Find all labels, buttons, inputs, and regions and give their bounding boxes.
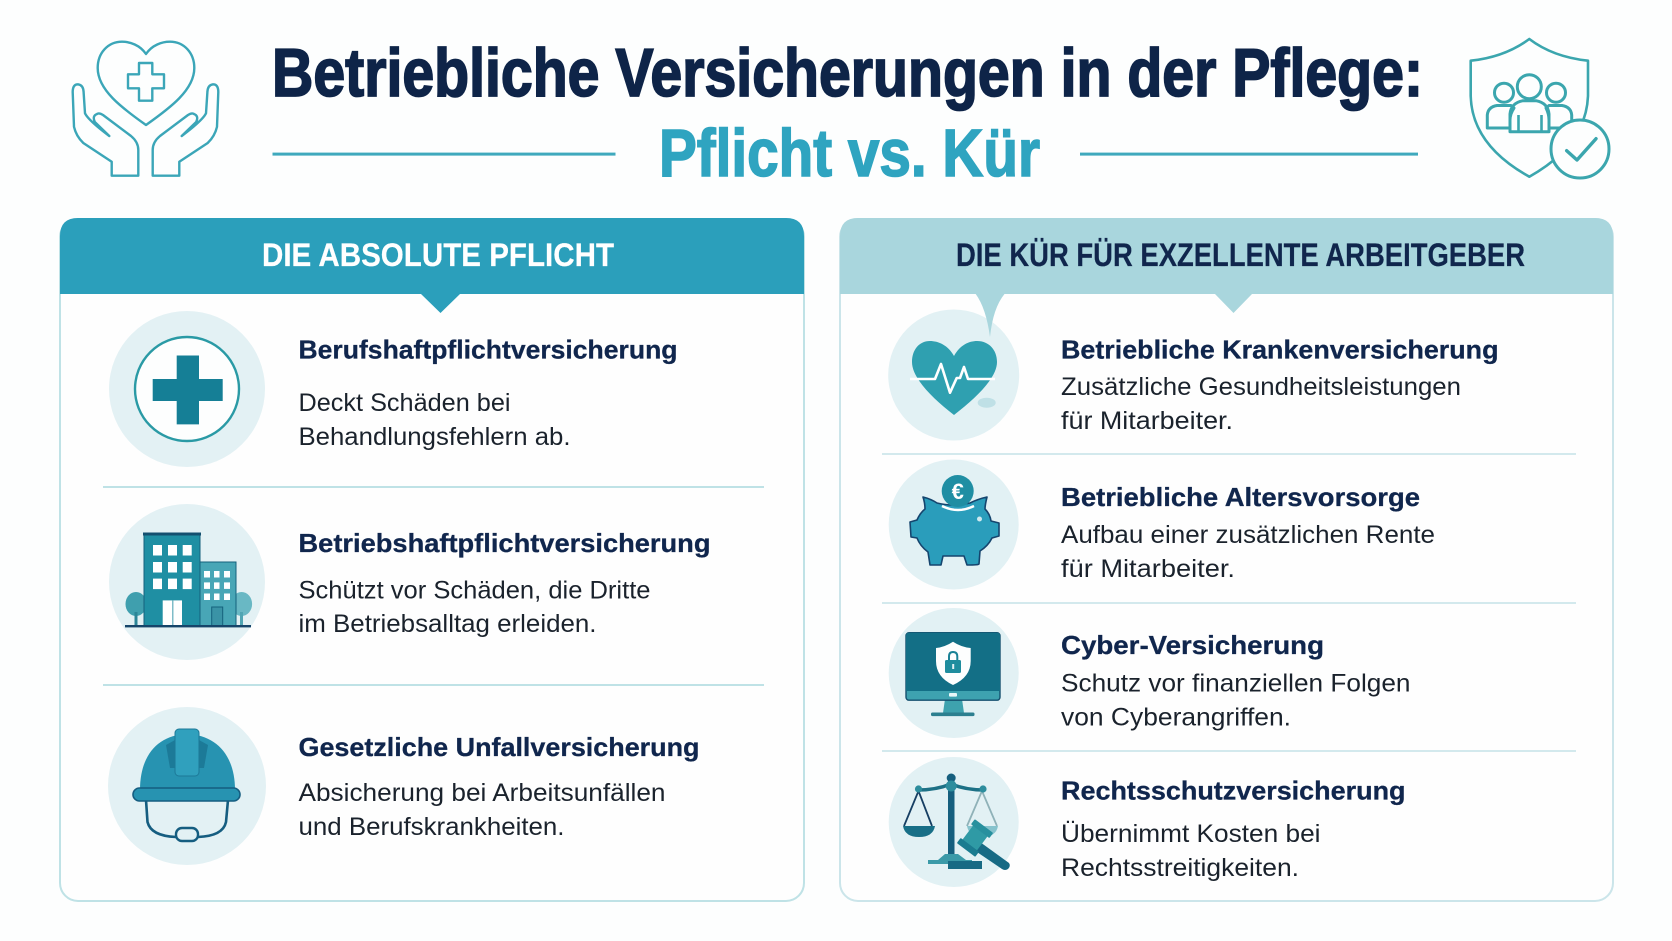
panel header: DIE KÜR FÜR EXZELLENTE ARBEITGEBER [956, 237, 1525, 273]
text: Rechtsschutzversicherung: Rechtsschutzversicherung [1061, 776, 1406, 806]
title: Betriebliche Versicherungen in der Pflege: [272, 35, 1423, 111]
text: Betriebliche Altersvorsorge: Betriebliche Altersvorsorge [1061, 482, 1420, 512]
text: Berufshaftpflichtversicherung [298, 334, 678, 451]
text: Betriebliche Altersvorsorge: für Mitarbeiter. [1061, 555, 1235, 583]
icon: building [109, 504, 265, 660]
text: Berufshaftpflichtversicherung: Berufshaftpflichtversicherung [298, 334, 678, 364]
text: Rechtsschutzversicherung: Übernimmt Kosten bei [1061, 820, 1320, 848]
text: Betriebshaftpflichtversicherung: Schützt vor Schäden, die Dritte [298, 576, 650, 604]
subtitle: Pflicht vs. Kür [659, 116, 1040, 191]
circle behind heart icon [888, 310, 1019, 440]
panel header: DIE ABSOLUTE PFLICHT [262, 237, 614, 273]
text: Cyber-Versicherung: von Cyberangriffen. [1061, 704, 1291, 732]
text: Cyber-Versicherung: Schutz vor finanziellen Folgen [1061, 670, 1410, 698]
icon: piggy bank: € [952, 479, 964, 504]
panel header [60, 218, 804, 313]
icon: heart with pulse [910, 341, 997, 415]
text: Berufshaftpflichtversicherung: Deckt Schäden bei [298, 389, 510, 417]
text: Betriebliche Krankenversicherung: Betriebliche Krankenversicherung [1061, 334, 1498, 364]
icon: hard hat [108, 707, 266, 865]
icon: medical cross [109, 311, 265, 467]
icon: shield with people and check [1471, 39, 1609, 178]
panel: die Kür [840, 218, 1613, 901]
text: Cyber-Versicherung: Cyber-Versicherung [1061, 630, 1324, 660]
text: Betriebliche Krankenversicherung: Zusätzliche Gesundheitsleistungen [1061, 373, 1461, 401]
panel: die absolute Pflicht [60, 218, 804, 901]
text: Berufshaftpflichtversicherung: Behandlungsfehlern ab. [298, 423, 570, 451]
text: Betriebshaftpflichtversicherung: Betriebshaftpflichtversicherung [298, 528, 710, 558]
text: Rechtsschutzversicherung: Rechtsstreitigkeiten. [1061, 854, 1299, 882]
divider lines [882, 454, 1576, 751]
icon: hands holding heart [73, 42, 218, 176]
text: Betriebshaftpflichtversicherung: im Betriebsalltag erleiden. [298, 610, 596, 638]
icon: piggy bank [889, 460, 1019, 590]
text: Betriebliche Krankenversicherung: für Mitarbeiter. [1061, 407, 1233, 435]
text: Gesetzliche Unfallversicherung: Absicherung bei Arbeitsunfällen [298, 779, 666, 807]
divider lines [103, 487, 764, 685]
subtitle [272, 116, 1418, 191]
text: Cyber-Versicherung [1061, 630, 1410, 732]
text: Gesetzliche Unfallversicherung [298, 732, 700, 841]
icon: scales with gavel [889, 757, 1019, 887]
text: Betriebliche Altersvorsorge [1061, 482, 1435, 583]
text: Betriebliche Altersvorsorge: Aufbau einer zusätzlichen Rente [1061, 521, 1435, 549]
panel header [840, 218, 1613, 337]
text: Betriebshaftpflichtversicherung [298, 528, 710, 638]
text: Betriebliche Krankenversicherung [1061, 334, 1498, 435]
text: Rechtsschutzversicherung [1061, 776, 1406, 882]
text: Gesetzliche Unfallversicherung: und Berufskrankheiten. [298, 813, 564, 841]
text: Gesetzliche Unfallversicherung: Gesetzliche Unfallversicherung [298, 732, 700, 762]
icon: monitor with shield [889, 608, 1019, 738]
